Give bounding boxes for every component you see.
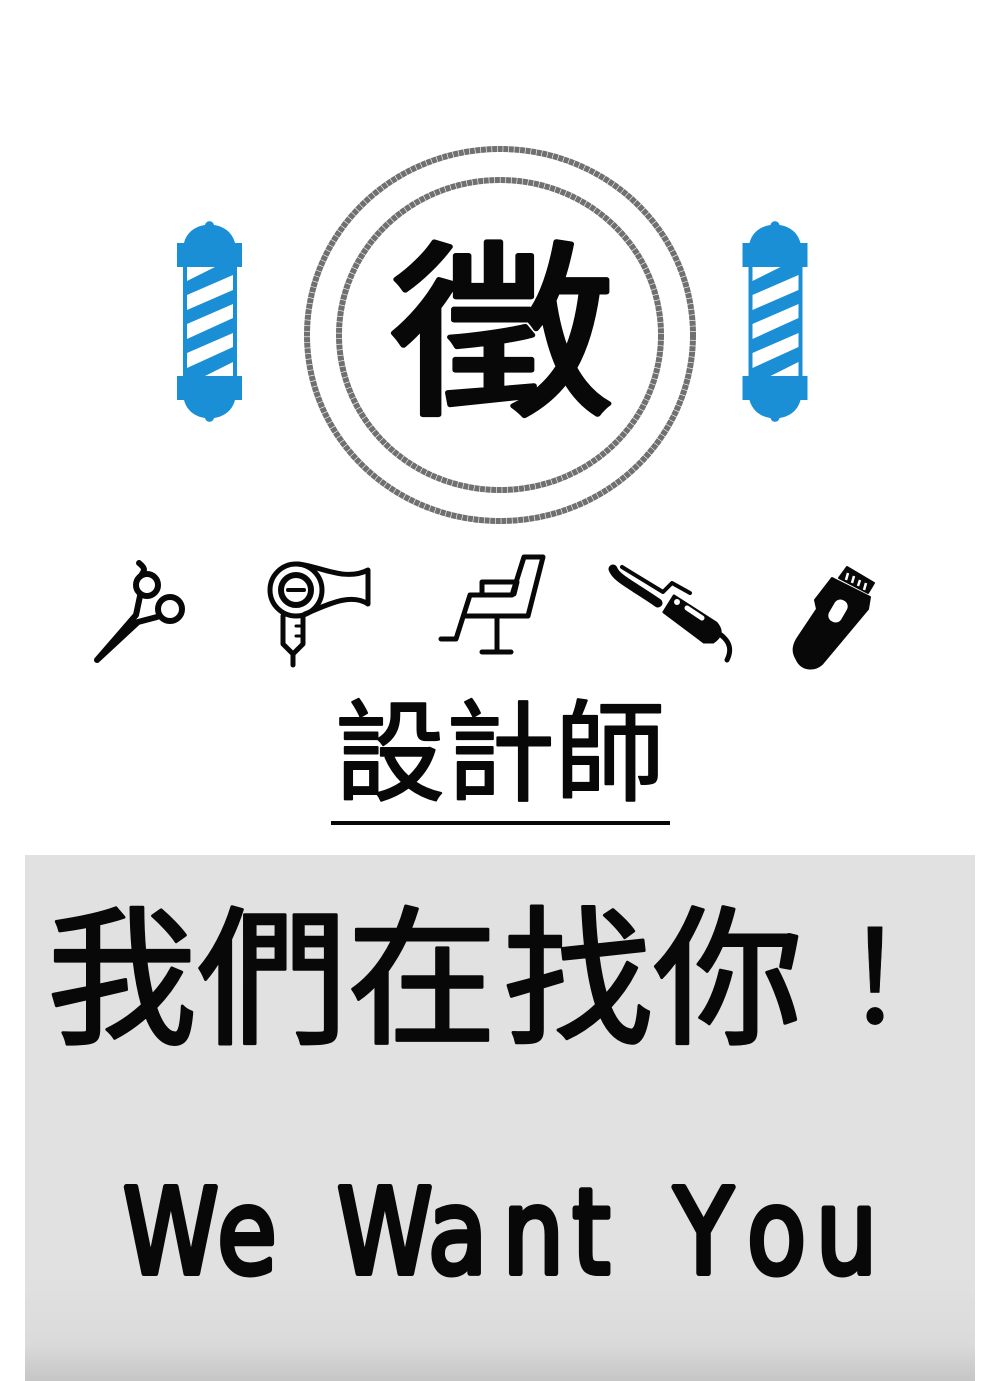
icon: scissors	[97, 563, 182, 660]
heading: 徵: 徵	[390, 230, 614, 440]
text: 我們在找你!: 我們在找你	[47, 896, 803, 1064]
text: We Want You: WeWantYou	[123, 1165, 877, 1301]
panel: gray recruiting banner	[25, 855, 975, 1381]
icon: salon chair	[441, 557, 543, 652]
emblem: double ring with 徵	[307, 149, 693, 521]
icon: hair clipper	[794, 567, 874, 669]
icon: curling iron	[613, 567, 730, 660]
text: 我們在找你!: ！	[810, 906, 940, 1052]
icon: hair dryer	[270, 564, 368, 665]
heading: 設計師: 設計師	[335, 693, 665, 816]
icon: left barber pole	[177, 221, 242, 422]
icon: right barber pole	[742, 221, 808, 422]
heading underline	[331, 821, 670, 825]
